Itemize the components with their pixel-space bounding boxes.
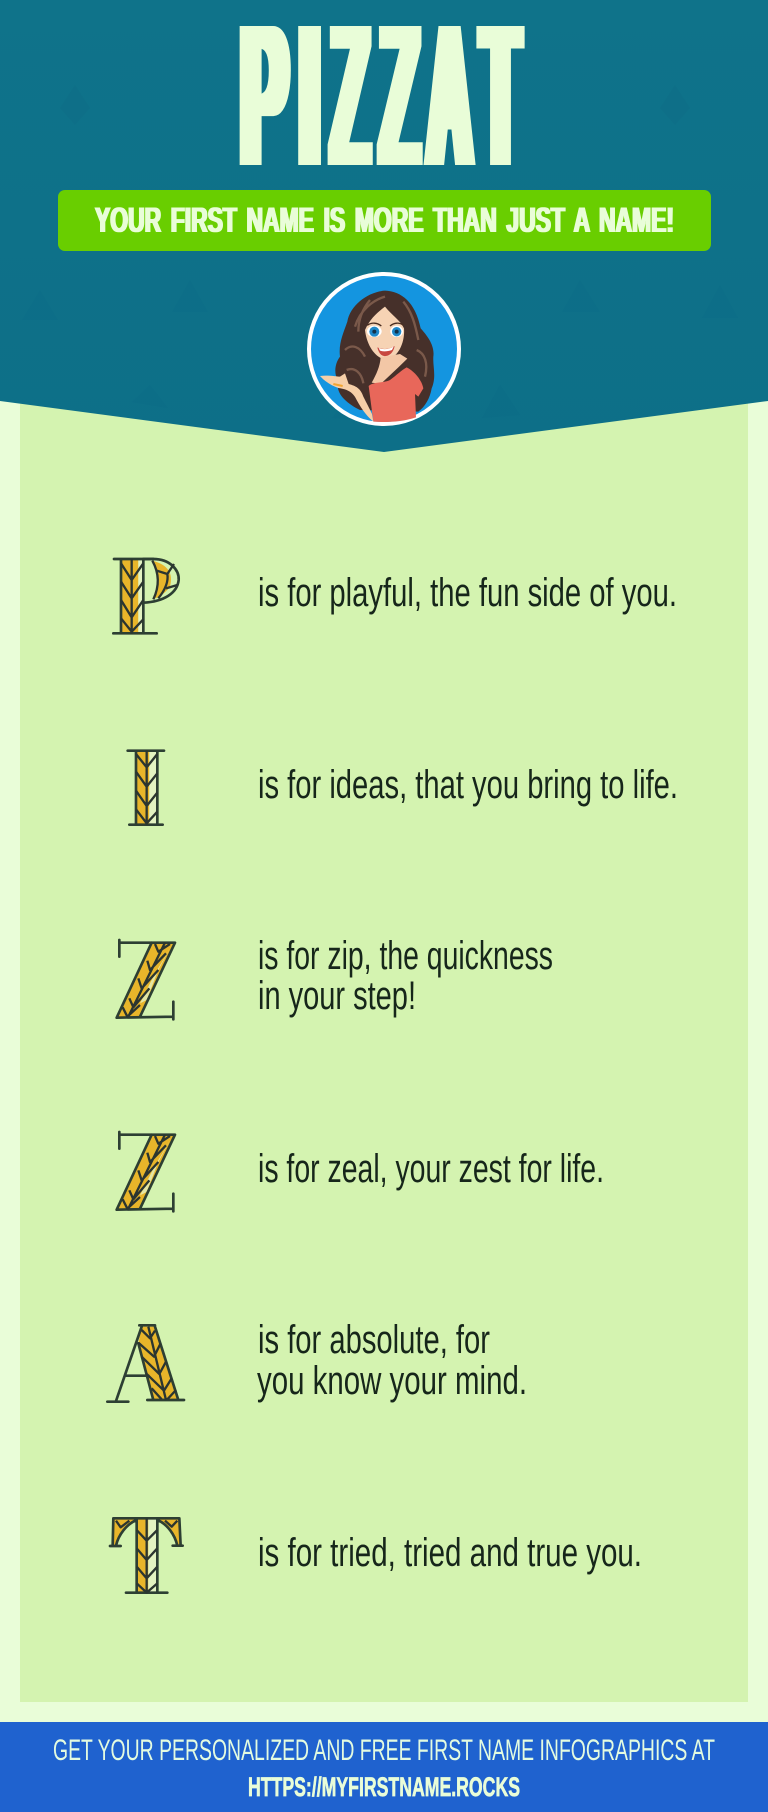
subtitle banner [58,190,711,251]
row 5 text [257,1318,527,1403]
icon: avatar of smiling woman [309,274,459,424]
row 5: letter A [107,1325,184,1402]
row 4 text: is for zeal, your zest for life. [258,1147,604,1191]
row 5 text: is for absolute, for [258,1318,490,1362]
header banner [0,0,768,452]
row 6 text: is for tried, tried and true you. [258,1531,642,1575]
row 2: letter I [128,751,164,825]
title [241,0,519,208]
panel: letter rows background [20,380,748,1702]
row 3 text: in your step! [258,974,416,1018]
row 3: letter Z [117,940,175,1019]
row 1: letter P [113,559,179,633]
footer: HTTPS://MYFIRSTNAME.ROCKS [248,1772,520,1802]
footer [0,1722,768,1812]
row 4: letter Z [117,1132,175,1211]
row 3 text [258,934,553,1018]
row 6: letter T [110,1518,183,1593]
row 3 text: is for zip, the quickness [258,934,553,978]
row 5 text: you know your mind. [257,1359,527,1403]
